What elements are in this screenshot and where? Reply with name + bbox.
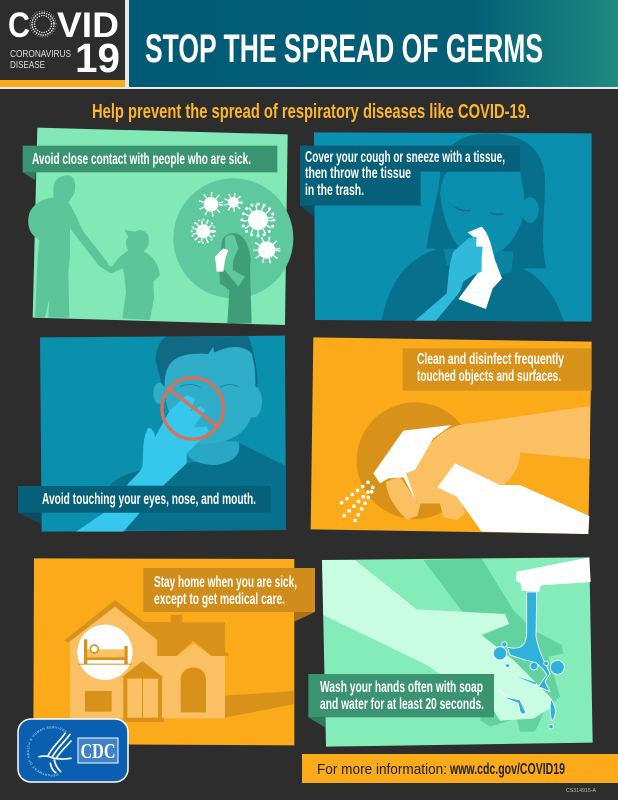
header: COVID-19 logo: CORONAVIRUS <box>10 49 71 60</box>
ears <box>153 383 165 404</box>
hair <box>427 133 546 268</box>
faucet <box>516 557 591 592</box>
panel: stay home: except to get medical care. <box>154 591 285 608</box>
tissue <box>458 227 502 309</box>
logo: HHS and CDC <box>17 718 129 783</box>
virus particles <box>192 194 278 261</box>
spray bottle head <box>373 425 452 501</box>
panel: wash hands <box>308 557 593 747</box>
neck <box>187 440 239 465</box>
face <box>440 172 524 258</box>
header: COVID-19 logo: DISEASE <box>10 60 45 71</box>
spray dots <box>338 482 373 521</box>
header: COVID-19 logo <box>0 0 125 87</box>
child silhouette <box>97 230 160 320</box>
panel: stay home: Stay home when you are sick, <box>154 574 297 591</box>
panel: stay home <box>33 558 315 745</box>
house shadow <box>225 691 294 718</box>
panel: cover cough: then throw the tissue <box>305 165 411 182</box>
arm <box>407 406 590 503</box>
fingers <box>386 477 465 520</box>
label ribbon <box>18 513 42 524</box>
header: COVID-19 logo: VID <box>57 6 119 45</box>
hair <box>155 336 257 390</box>
panel: avoid close contact <box>23 128 293 325</box>
icon: CDC mark: CDC <box>80 739 116 763</box>
panel: cover cough: Cover your cough or sneeze with a tissue, <box>305 149 505 166</box>
label ribbon <box>294 612 315 622</box>
arched window <box>181 667 206 712</box>
logo: HHS and CDC: DEPARTMENT OF HEALTH & HUMAN SERVICES USA <box>26 726 67 776</box>
label ribbon <box>403 348 592 391</box>
hand <box>415 237 483 321</box>
back hand <box>423 559 563 732</box>
header: COVID-19 logo: 19 <box>75 35 120 81</box>
panel: clean and disinfect <box>311 337 592 534</box>
panel: avoid close contact: Avoid close contact with people who are sick. <box>32 151 251 168</box>
hand <box>76 395 209 532</box>
footer: more information bar: www.cdc.gov/COVID19 <box>449 761 565 778</box>
face <box>165 347 255 444</box>
shoulders <box>382 248 564 322</box>
header: COVID-19 logo: C <box>8 6 30 45</box>
shirt <box>110 442 286 531</box>
porch <box>122 661 164 722</box>
sick person <box>215 233 252 323</box>
footer: more information bar: For more information: <box>317 761 447 778</box>
label ribbon <box>308 717 325 727</box>
roof <box>64 600 228 656</box>
label ribbon <box>300 206 314 217</box>
shadow circle <box>357 402 473 519</box>
panel: cover cough: in the trash. <box>305 182 364 199</box>
panel: wash hands: and water for at least 20 seconds. <box>320 696 484 713</box>
prohibition sign <box>162 378 223 439</box>
label ribbon <box>23 172 36 180</box>
bottle body <box>437 463 589 534</box>
panel: avoid touching face: Avoid touching your eyes, nose, and mouth. <box>42 491 256 508</box>
neck <box>443 248 513 275</box>
publication code: CS314915-A <box>566 788 596 794</box>
footer: more information bar <box>302 754 618 783</box>
panel: avoid touching face <box>18 336 286 532</box>
adult silhouette <box>28 175 108 318</box>
panel: cover cough <box>300 132 592 322</box>
front hand <box>322 560 552 721</box>
header: title banner <box>0 0 618 89</box>
panel: wash hands: Wash your hands often with soap <box>320 679 483 696</box>
bed in circle <box>77 625 133 680</box>
icon: HHS eagle <box>39 733 71 773</box>
house walls <box>70 607 225 718</box>
water <box>493 592 564 729</box>
window <box>85 691 112 712</box>
